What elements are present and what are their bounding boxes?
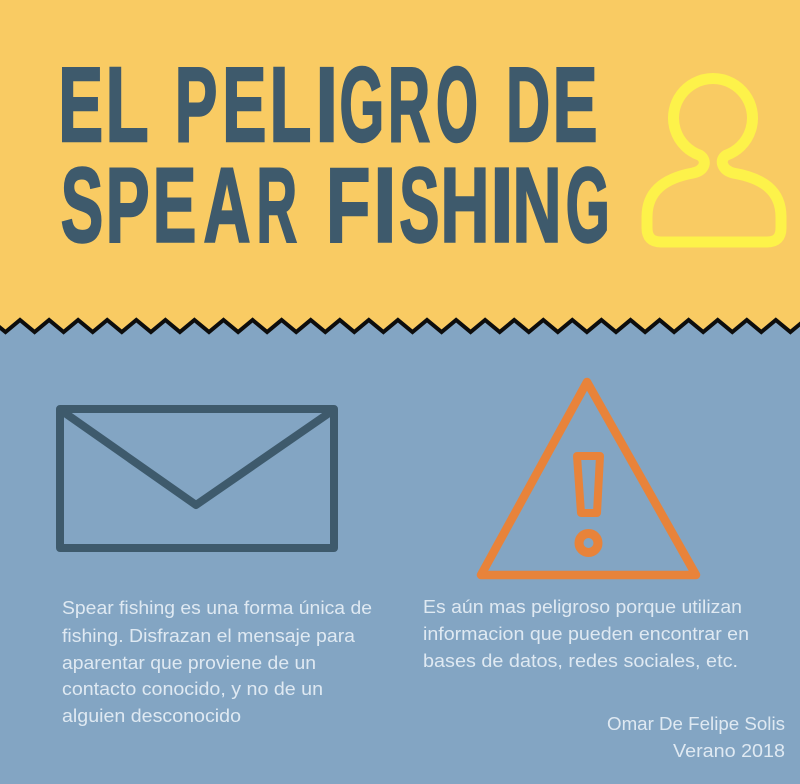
title: L [270,46,311,164]
title: P [175,46,217,164]
header panel: yellow with black zigzag edge [0,0,800,332]
text block: left description: alguien desconocido [62,706,241,726]
title: L [106,46,147,164]
text block: left description: fishing. Disfrazan el mensaje para [62,626,356,646]
title: I [373,147,397,265]
title: N [512,147,562,265]
text block: author credit [607,714,785,761]
text block: left description: contacto conocido, y no de un [62,679,323,699]
text block: author credit: Verano 2018 [673,741,785,761]
text block: left description: Spear fishing es una forma única de [62,598,372,618]
title: I [490,147,514,265]
title [58,46,610,265]
text block: left description [62,598,372,726]
title: S [399,147,439,265]
title: P [106,147,150,265]
title: G [566,147,610,265]
icon: envelope [60,409,334,548]
text block: author credit: Omar De Felipe Solis [607,714,785,734]
title: D [506,46,550,164]
title: H [440,147,489,265]
title: G [340,46,384,164]
icon: warning triangle [481,382,696,575]
title: I [315,46,338,164]
title: E [58,46,103,164]
title: E [222,46,266,164]
title: E [153,147,196,265]
title: O [436,46,478,164]
text block: left description: aparentar que proviene de un [62,653,316,673]
text block: right description: Es aún mas peligroso porque utilizan [423,597,742,617]
text block: right description [423,597,749,671]
icon: person outline [647,79,781,242]
text block: right description: bases de datos, redes sociales, etc. [423,651,738,671]
title: E [553,46,598,164]
title: F [326,147,370,265]
title: A [204,147,250,265]
title: S [61,147,103,265]
text block: right description: informacion que pueden encontrar en [423,624,749,644]
title: R [388,46,430,164]
title: R [256,147,297,265]
